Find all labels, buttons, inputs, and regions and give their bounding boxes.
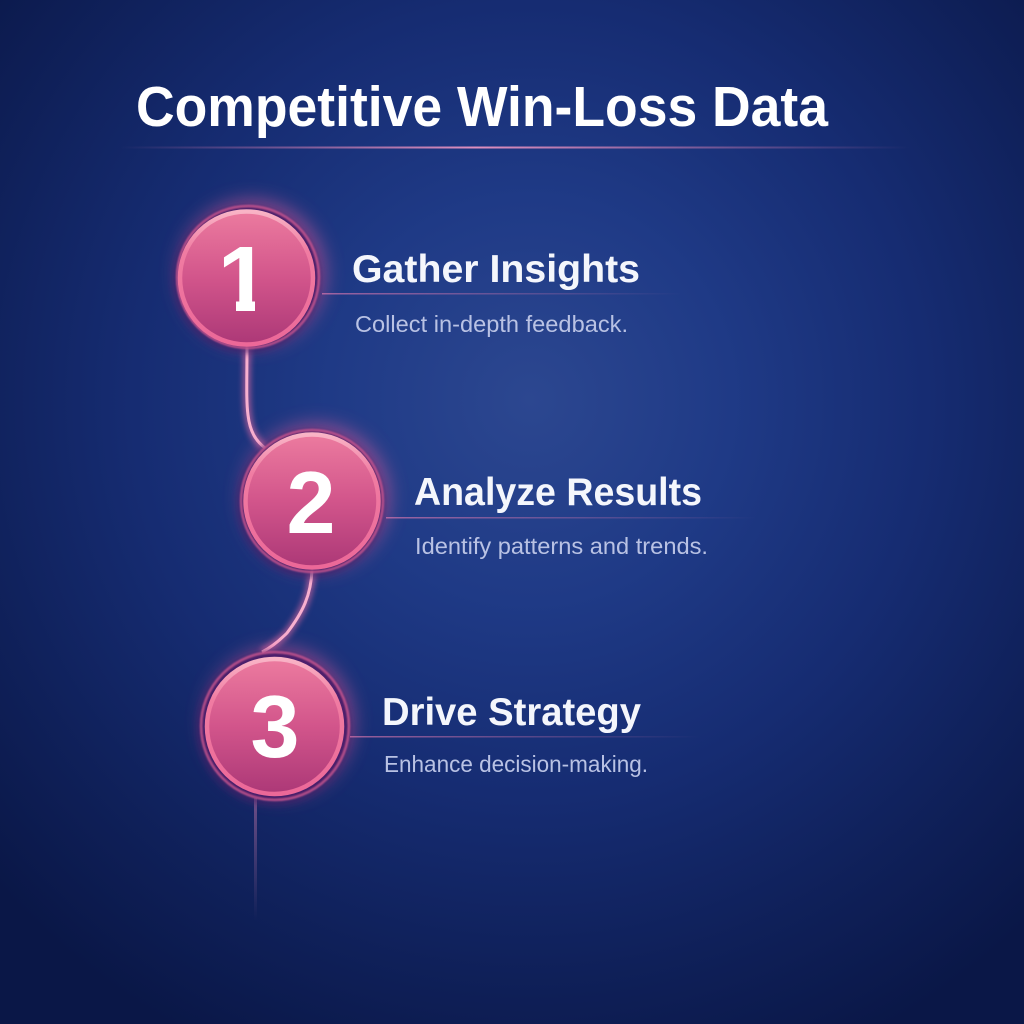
heading 2: Analyze Results: [414, 471, 702, 514]
badge 1: [172, 201, 324, 354]
description 3: Enhance decision-making.: [384, 751, 648, 777]
step 2: [236, 425, 756, 578]
step 3: [196, 649, 700, 806]
badge 3: 3: [251, 677, 299, 776]
description 1: Collect in-depth feedback.: [355, 311, 628, 337]
description 2: Identify patterns and trends.: [415, 533, 708, 559]
divider 2: [386, 517, 756, 518]
connector: step 1 to step 2: [247, 345, 265, 448]
divider 3: [350, 736, 700, 738]
badge 2: 2: [287, 453, 335, 552]
divider 1: [322, 293, 682, 294]
heading 3: Drive Strategy: [382, 691, 641, 734]
badge 2: [236, 425, 388, 578]
badge 3: [196, 649, 352, 806]
title underline: [120, 146, 910, 148]
connector: step 2 to step 3: [262, 570, 312, 652]
title: Competitive Win-Loss Data: [136, 75, 829, 139]
heading 1: Gather Insights: [352, 248, 640, 291]
connector: tail below step 3: [254, 798, 257, 920]
badge 1: 1: [218, 227, 269, 331]
step 1: [172, 201, 682, 354]
